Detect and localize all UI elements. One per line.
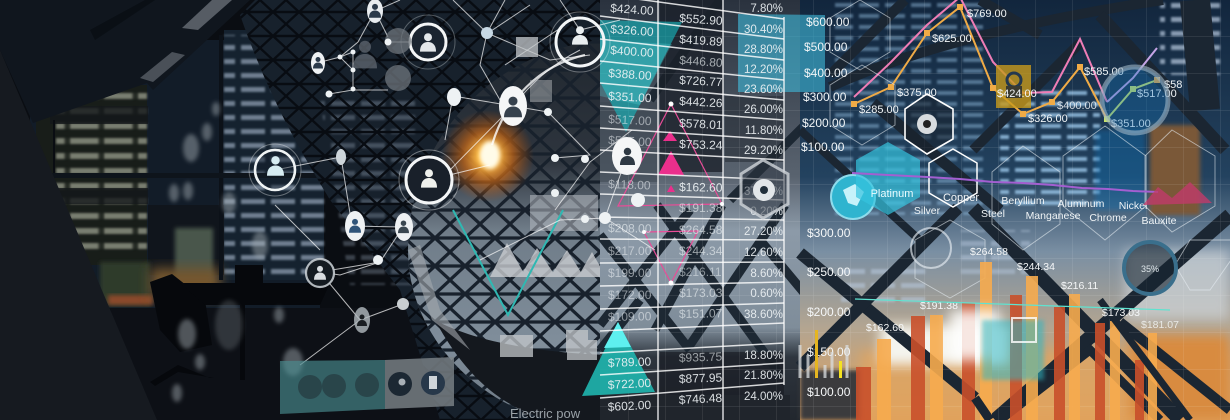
person node lower right bbox=[395, 213, 413, 241]
ceiling bbox=[0, 0, 250, 123]
table column three percentages: 37.80% bbox=[744, 186, 783, 198]
line chart value labels: $326.00 bbox=[1028, 113, 1068, 125]
line chart markers bbox=[851, 4, 1160, 122]
person node top bbox=[367, 0, 383, 23]
person ring node window bbox=[249, 144, 301, 196]
pink triangle chart marks bbox=[618, 102, 724, 286]
right cityscape background bbox=[800, 0, 1230, 420]
table column one prices: $400.00 bbox=[610, 43, 654, 60]
line chart bbox=[854, 0, 1157, 119]
table column two prices: $578.01 bbox=[679, 116, 723, 132]
bar chart axis labels: $250.00 bbox=[807, 265, 851, 279]
table column two prices bbox=[678, 11, 723, 407]
building lattice dome bbox=[240, 0, 600, 420]
bar chart value labels: $244.34 bbox=[1017, 261, 1055, 273]
blurred foreground bokeh nodes bbox=[169, 102, 303, 402]
cyan highlight panel percent column bbox=[738, 14, 825, 92]
bar chart value labels bbox=[866, 246, 1179, 334]
table column two prices: $746.48 bbox=[678, 391, 723, 407]
floating tiles in globe bbox=[500, 37, 597, 360]
table column two prices: $151.07 bbox=[679, 306, 723, 321]
table column three percentages: 0.20% bbox=[750, 206, 783, 218]
person node left bbox=[311, 52, 325, 74]
cyan gauge ring bbox=[1102, 67, 1168, 133]
table column three percentages: 21.80% bbox=[744, 370, 783, 382]
person node lower bbox=[345, 211, 365, 241]
table column one prices bbox=[607, 1, 654, 414]
table column three percentages bbox=[744, 3, 783, 403]
red bars bbox=[856, 295, 1144, 420]
table column three percentages: 0.60% bbox=[750, 288, 783, 300]
left axis of line chart: $300.00 bbox=[803, 90, 847, 104]
person ring node top right bbox=[550, 12, 610, 72]
table column two prices: $446.80 bbox=[679, 53, 723, 70]
teal outline triangle bbox=[453, 210, 563, 315]
element name labels: Steel bbox=[981, 208, 1005, 220]
bar chart value labels: $216.11 bbox=[1061, 280, 1098, 292]
table column two prices: $552.90 bbox=[679, 11, 723, 28]
element name labels: Bauxite bbox=[1141, 215, 1177, 227]
table column two prices: $162.60 bbox=[679, 180, 723, 195]
purple trend line bbox=[852, 173, 1158, 192]
globe bbox=[408, 40, 620, 420]
bar chart axis labels: $300.00 bbox=[807, 226, 851, 240]
table column one prices: $602.00 bbox=[607, 398, 652, 414]
person ring node upper bbox=[401, 15, 455, 69]
financial table grid bbox=[600, 0, 784, 420]
table column two prices: $877.95 bbox=[679, 370, 723, 386]
table column two prices: $753.24 bbox=[679, 137, 723, 153]
left axis of line chart bbox=[801, 15, 850, 154]
bar chart axis labels: $100.00 bbox=[807, 385, 851, 399]
fine grid overlay bbox=[600, 0, 1230, 420]
table column three percentages: 27.20% bbox=[744, 226, 783, 238]
hexagon: platinum bbox=[856, 142, 920, 215]
table column one prices: $118.00 bbox=[608, 177, 651, 192]
hexagon: copper: Copper bbox=[943, 192, 979, 204]
element name labels: Aluminum bbox=[1058, 198, 1105, 210]
table column one prices: $585.00 bbox=[608, 133, 652, 149]
dark table cells bbox=[600, 0, 790, 420]
bottom icon panel bbox=[280, 357, 454, 414]
bar chart axis labels bbox=[807, 226, 851, 399]
table column three percentages: 12.60% bbox=[744, 247, 783, 259]
line chart value labels: $517.00 bbox=[1137, 88, 1177, 100]
table column three percentages: 24.00% bbox=[744, 391, 783, 403]
globe badge bbox=[831, 175, 875, 219]
small dim person node bbox=[354, 307, 370, 333]
table column three percentages: 28.80% bbox=[744, 44, 783, 56]
element name labels: Beryllium bbox=[1001, 195, 1045, 207]
table column one prices: $517.00 bbox=[608, 112, 652, 128]
line chart value labels: $58 bbox=[1164, 79, 1182, 91]
table column one prices: $199.00 bbox=[608, 266, 652, 280]
table column two prices: $191.38 bbox=[679, 201, 723, 215]
teal highlight panel top bbox=[600, 20, 682, 132]
table column one prices: $351.00 bbox=[608, 89, 652, 105]
grey silhouette person bbox=[353, 41, 377, 68]
table column one prices: $109.00 bbox=[608, 309, 652, 324]
element name labels bbox=[914, 195, 1177, 227]
line chart value labels: $585.00 bbox=[1084, 66, 1124, 78]
element name labels: Chrome bbox=[1089, 212, 1127, 224]
person ring node by flare bbox=[399, 150, 459, 210]
table column three percentages: 23.60% bbox=[744, 84, 783, 96]
hexagon: target icon bbox=[905, 94, 953, 154]
table column one prices: $172.00 bbox=[608, 288, 652, 302]
hexagon: platinum: Platinum bbox=[871, 188, 913, 200]
person ring node bottom bbox=[306, 259, 334, 287]
network nodes bbox=[326, 27, 645, 310]
table column two prices: $173.03 bbox=[679, 286, 723, 300]
person node table bbox=[612, 137, 642, 175]
meeting table and chairs bbox=[150, 265, 330, 386]
line chart value labels: $375.00 bbox=[897, 87, 937, 99]
bar chart axis labels: $200.00 bbox=[807, 305, 851, 319]
table column three percentages: 7.80% bbox=[750, 3, 783, 15]
table column one prices: $217.00 bbox=[608, 244, 652, 258]
table column two prices: $264.58 bbox=[679, 223, 723, 237]
bar chart value labels: $191.38 bbox=[920, 300, 958, 312]
steel beams right side bbox=[800, 0, 1230, 420]
bar chart bbox=[856, 262, 1157, 420]
line chart value labels: $625.00 bbox=[932, 33, 972, 45]
bar chart value labels: $162.60 bbox=[866, 322, 904, 334]
table column three percentages: 12.20% bbox=[744, 64, 783, 76]
line chart value labels: $400.00 bbox=[1057, 100, 1097, 112]
table column two prices: $244.34 bbox=[679, 244, 723, 258]
table column three percentages: 18.80% bbox=[744, 350, 783, 362]
line chart value labels: $285.00 bbox=[859, 104, 899, 116]
bar chart value labels: $264.58 bbox=[970, 246, 1008, 258]
table column three percentages: 29.20% bbox=[744, 145, 783, 157]
line chart value labels: $424.00 bbox=[997, 88, 1037, 100]
mini yellow bars bbox=[800, 330, 847, 378]
gauge bottom right bbox=[1124, 242, 1176, 294]
network arc bbox=[492, 55, 585, 145]
left axis of line chart: $100.00 bbox=[801, 140, 845, 154]
steel beams behind table bbox=[600, 0, 810, 377]
floor bbox=[110, 308, 470, 420]
hexagon: copper bbox=[929, 149, 979, 207]
window with night skyline bbox=[30, 30, 330, 308]
table column one prices: $424.00 bbox=[610, 1, 654, 18]
table column one prices: $789.00 bbox=[608, 354, 652, 370]
orange bars bbox=[877, 262, 1157, 420]
table column two prices: $216.11 bbox=[679, 265, 722, 279]
line chart value labels bbox=[859, 8, 1182, 130]
bar chart value labels: $181.07 bbox=[1141, 319, 1179, 331]
table column two prices: $419.89 bbox=[679, 32, 723, 49]
left axis of line chart: $500.00 bbox=[804, 40, 848, 54]
table column three percentages: 11.80% bbox=[745, 125, 783, 137]
table column two prices: $935.75 bbox=[679, 349, 723, 365]
gauge bottom right: 35% bbox=[1141, 264, 1159, 274]
left axis of line chart: $600.00 bbox=[806, 15, 850, 29]
dashboard backdrop bbox=[600, 0, 810, 420]
line chart value labels: $351.00 bbox=[1111, 118, 1151, 130]
ring icon near dashed hexagon bbox=[911, 228, 951, 268]
outline hexagons and element labels bbox=[830, 0, 1230, 298]
table column one prices: $388.00 bbox=[608, 66, 652, 83]
table column one prices: $722.00 bbox=[607, 376, 652, 392]
table column three percentages: 26.00% bbox=[744, 104, 783, 116]
person node bright bbox=[499, 86, 527, 126]
element name labels: Nickel bbox=[1119, 200, 1147, 212]
left axis of line chart: $400.00 bbox=[804, 66, 848, 80]
table column three percentages: 30.40% bbox=[744, 24, 783, 36]
teal horizontal trend line bbox=[855, 299, 1170, 310]
element name labels: Manganese bbox=[1026, 210, 1081, 222]
orange lens flare bbox=[442, 110, 534, 202]
table column three percentages: 8.60% bbox=[750, 268, 783, 280]
yellow icon tile bbox=[996, 65, 1031, 108]
table column one prices: $326.00 bbox=[610, 22, 654, 39]
bar chart axis labels: $150.00 bbox=[807, 345, 851, 359]
network connections bbox=[275, 0, 655, 365]
concrete column bbox=[0, 50, 157, 420]
left axis of line chart: $200.00 bbox=[802, 116, 846, 130]
table column two prices: $726.77 bbox=[679, 73, 723, 89]
mini mountain chart bbox=[1143, 182, 1212, 205]
diagonal beams over bars bbox=[975, 300, 1190, 420]
teal triangle lower bbox=[582, 322, 655, 396]
table column three percentages: 38.60% bbox=[744, 309, 783, 321]
line chart value labels: $769.00 bbox=[967, 8, 1007, 20]
table column one prices: $208.00 bbox=[608, 221, 652, 236]
bar chart value labels: $173.03 bbox=[1102, 307, 1140, 319]
bright centre flare over bars bbox=[950, 310, 1044, 380]
table column two prices: $442.26 bbox=[679, 94, 723, 110]
element name labels: Silver bbox=[914, 205, 941, 217]
grey discs bbox=[385, 28, 411, 91]
hexagon gauge on table bbox=[741, 160, 788, 218]
